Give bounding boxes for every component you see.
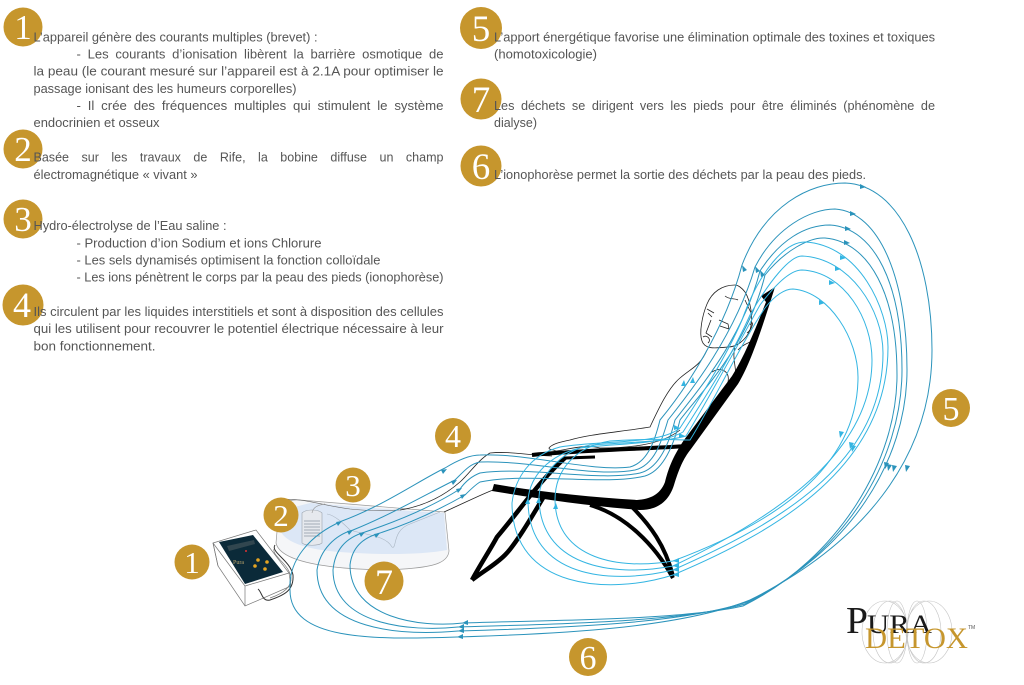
text block 7: waste to feet: dialyse) [494, 116, 537, 130]
chair back and seat [492, 287, 775, 510]
badge 7 top: 7 [472, 80, 490, 121]
logo: Pura Detox: P [846, 600, 868, 642]
badge 1 lower [174, 544, 210, 580]
badge 4 top: 4 [13, 285, 31, 325]
badge 6 lower: 6 [580, 640, 596, 677]
logo: Pura Detox: URA [867, 610, 932, 639]
text block 3: hydro-electrolysis [34, 219, 444, 284]
badge 7 lower: 7 [375, 562, 393, 602]
text block 3: hydro-electrolysis: - Production d’ion Sodium et ions Chlorure [76, 236, 322, 250]
badge 2 lower [264, 498, 298, 533]
text block 1: device currents: - Il crée des fréquences multiples qui stimulent le système [76, 99, 444, 113]
text block 2: coil [34, 150, 444, 182]
chair [472, 287, 775, 580]
text block 4: interstitial fluids: qui les utilisent pour recouvrer le potentiel électrique nécessaire à leur [34, 322, 444, 336]
badge 2 top [4, 130, 42, 169]
badge 1 lower: 1 [184, 545, 200, 580]
text block 2: coil: Basée sur les travaux de Rife, la bobine diffuse un champ [34, 150, 444, 164]
text block 4: interstitial fluids: Ils circulent par les liquides interstitiels et sont à disposition des cellules [34, 305, 444, 319]
logo: Pura Detox: TM [968, 625, 975, 631]
chair front leg [472, 457, 566, 580]
control device: Pura [233, 560, 244, 566]
text block 1: device currents: passage ionisant des les humeurs corporelles) [34, 82, 296, 96]
text block 7: waste to feet [494, 99, 935, 130]
badge 6 lower [569, 638, 607, 677]
text block 3: hydro-electrolysis: Hydro-électrolyse de l’Eau saline : [34, 219, 226, 233]
text block 1: device currents [34, 30, 444, 130]
text block 5: energy input: L’apport énergétique favorise une élimination optimale des toxines et toxiques [494, 30, 935, 44]
badge 3 lower [336, 468, 370, 503]
text block 1: device currents: - Les courants d’ionisation libèrent la barrière osmotique de [76, 48, 444, 62]
badge 1 top [4, 8, 42, 47]
badge 2 top: 2 [14, 130, 32, 169]
badge 4 lower [435, 418, 471, 454]
text block 4: interstitial fluids [34, 305, 444, 354]
badge 6 top [460, 146, 502, 188]
chair arm rest [532, 446, 688, 455]
text block 4: interstitial fluids: bon fonctionnement. [34, 340, 156, 354]
badge 1 top: 1 [14, 8, 32, 47]
badge 3 top [4, 200, 42, 239]
logo: Pura Detox [846, 600, 975, 663]
badge 5 top [460, 7, 502, 50]
badge 2 lower: 2 [273, 498, 289, 533]
text block 3: hydro-electrolysis: - Les ions pénètrent le corps par la peau des pieds (ionophorèse) [76, 270, 444, 284]
text block 7: waste to feet: Les déchets se dirigent vers les pieds pour être éliminés (phénomène de [494, 99, 935, 113]
text block 5: energy input: (homotoxicologie) [494, 48, 597, 62]
flow lines: outer dark blue [290, 183, 932, 638]
badge 5 lower [932, 389, 970, 428]
logo: Pura Detox: DETOX [865, 622, 968, 655]
text block 1: device currents: endocrinien et osseux [34, 116, 160, 130]
badge 3 lower: 3 [345, 468, 361, 503]
text block 6: ionophoresis: L’ionophorèse permet la sortie des déchets par la peau des pieds. [494, 168, 866, 182]
control device [213, 530, 293, 606]
badge 7 top [460, 78, 502, 121]
person seated [400, 285, 753, 512]
foot bath [276, 499, 449, 570]
text block 5: energy input [494, 30, 935, 62]
flow lines: inner light blue [512, 242, 888, 585]
badge 7 lower [364, 562, 404, 602]
badge 6 top: 6 [472, 147, 490, 188]
badge 4 lower: 4 [445, 418, 461, 454]
badge 4 top [2, 284, 44, 326]
flow arrowheads [336, 184, 910, 639]
badge 5 lower: 5 [942, 391, 960, 428]
text block 3: hydro-electrolysis: - Les sels dynamisés optimisent la fonction colloïdale [76, 254, 381, 268]
icon: coil [302, 504, 325, 545]
text block 2: coil: électromagnétique « vivant » [34, 168, 198, 182]
badge 3 top: 3 [14, 200, 32, 239]
chair arm detail [566, 457, 595, 458]
badge 5 top: 5 [472, 9, 490, 50]
text block 1: device currents: L’appareil génère des courants multiples (brevet) : [34, 30, 318, 44]
text block 1: device currents: la peau (le courant mesuré sur l’appareil est à 2.1A pour optimiser le [34, 64, 444, 78]
chair back leg [590, 505, 673, 578]
